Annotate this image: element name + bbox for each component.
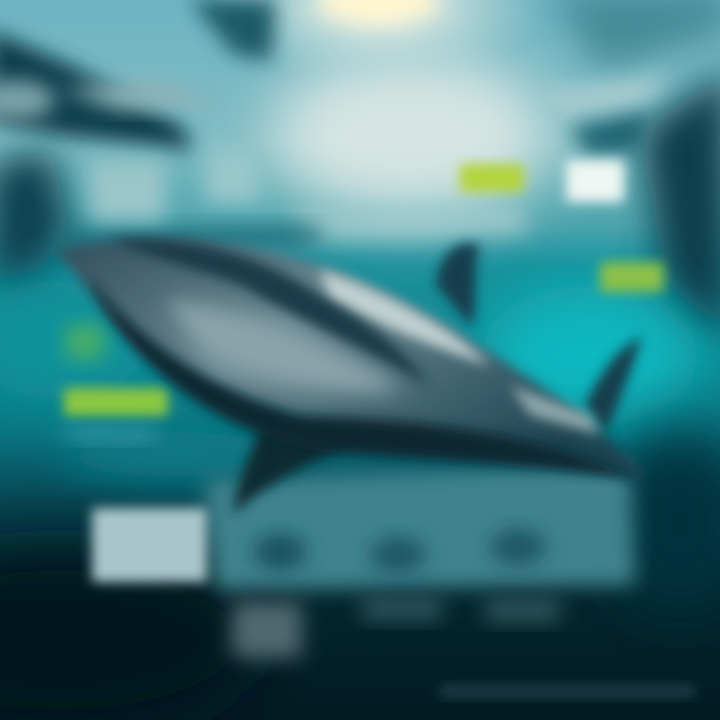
- footer text: [440, 684, 694, 698]
- shark dark back stripe: [110, 239, 430, 385]
- label: left caption: [66, 425, 156, 441]
- label: left green icon: [66, 325, 104, 359]
- label: upper green text: [460, 164, 524, 192]
- pale info blocks, upper area: [90, 148, 260, 220]
- caption block one: [232, 602, 302, 658]
- caption block three: [485, 598, 560, 622]
- icon: circle one: [254, 534, 306, 570]
- label: left green text: [64, 388, 168, 416]
- shark body: [55, 239, 650, 480]
- dark water top left: [0, 0, 320, 280]
- icon: circle two: [370, 537, 426, 573]
- shark: [55, 239, 650, 515]
- dark water top right: [540, 0, 720, 340]
- surface light: [208, 0, 550, 240]
- label: right green text: [600, 262, 664, 292]
- shark pectoral fin: [232, 425, 345, 515]
- caption block two: [362, 596, 442, 620]
- panel: white text card: [92, 508, 207, 582]
- shark flank highlight: [165, 300, 405, 392]
- panel: lower data strip: [92, 465, 635, 590]
- icon: circle three: [490, 529, 546, 565]
- shark rear highlight: [510, 385, 600, 435]
- shark pale back: [320, 270, 490, 365]
- shark lower shadow: [85, 275, 645, 480]
- shark dorsal fin: [436, 243, 480, 328]
- label: upper white box: [566, 160, 624, 202]
- shark tail fin: [585, 336, 642, 435]
